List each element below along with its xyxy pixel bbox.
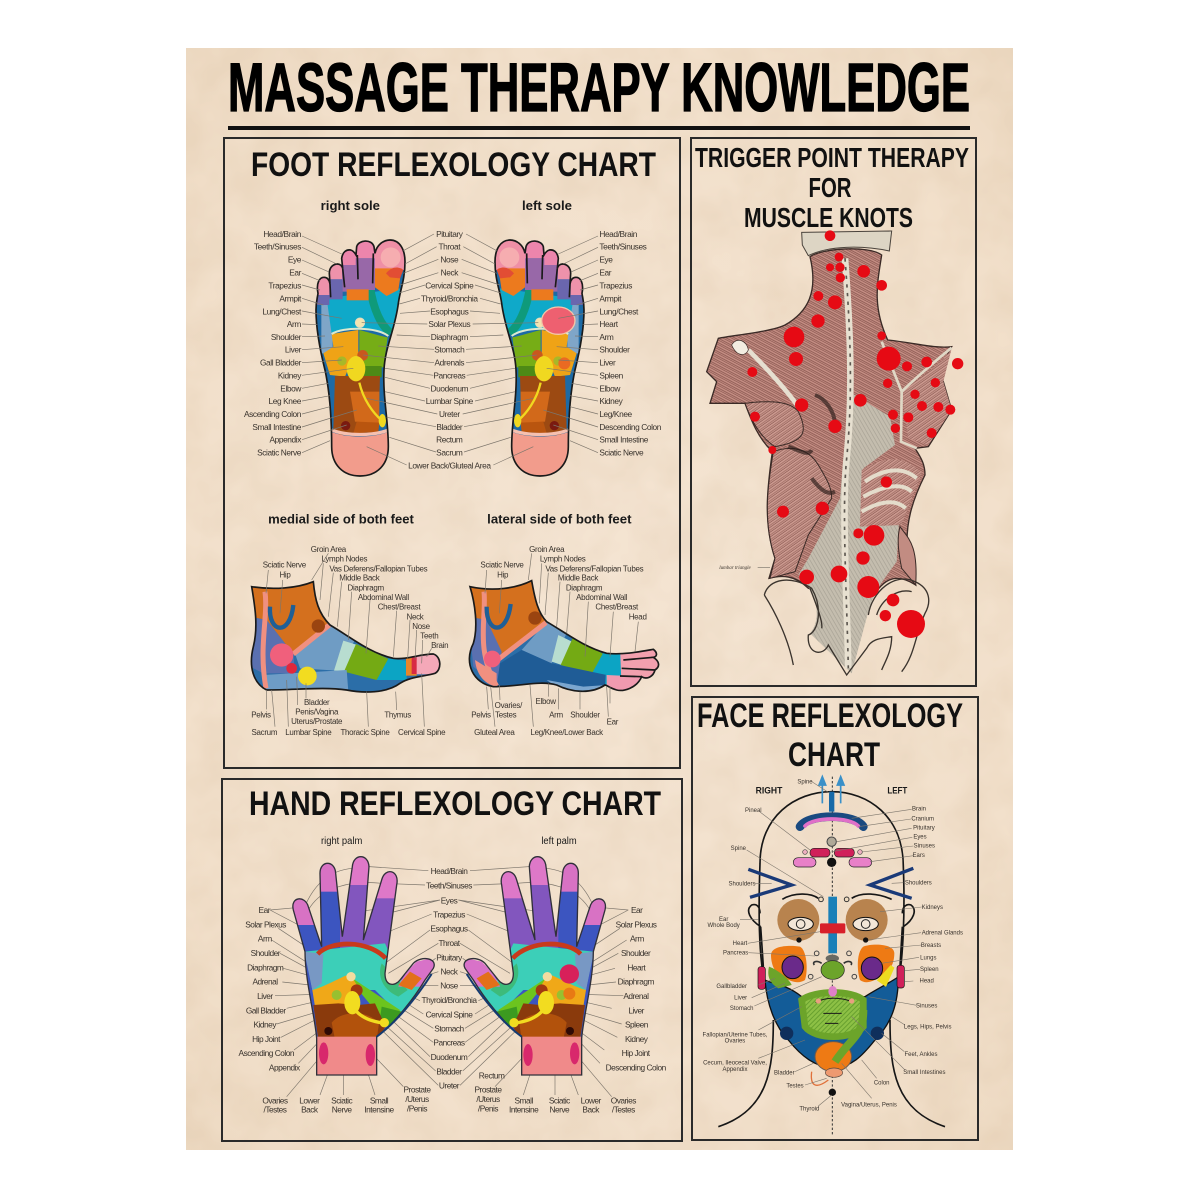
labels: side views: Uterus/Prostate <box>291 717 343 726</box>
labels: left sole: Liver <box>599 358 616 368</box>
labels: centre column: Rectum <box>436 435 463 445</box>
labels: face: Sinuses <box>916 1003 937 1009</box>
chart: palms: left palm <box>541 836 577 847</box>
labels: side views: Sciatic Nerve <box>263 560 307 569</box>
labels: side views: Thymus <box>384 710 411 719</box>
labels: side views: Hip <box>497 570 509 579</box>
labels: right sole: Leg Knee <box>269 396 302 406</box>
labels: left sole: Kidney <box>599 396 624 406</box>
chart: side views of the feet: medial side of both feet <box>268 512 415 526</box>
labels: centre column: Lower Back/Gluteal Area <box>408 460 491 470</box>
labels: palms: Solar Plexus <box>616 919 657 929</box>
icon: left palm <box>460 850 610 1080</box>
icon: right sole <box>313 237 407 480</box>
labels: palms: Hip Joint <box>622 1048 651 1058</box>
labels: palms: Diaphragm <box>247 962 284 972</box>
labels: palms: /Uterus <box>405 1094 429 1104</box>
labels: face <box>703 779 963 1113</box>
labels: face: Heart <box>733 941 748 947</box>
labels: side views: Pelvis <box>251 710 271 719</box>
labels: face: Liver <box>734 996 747 1002</box>
labels: palms: /Uterus <box>476 1094 500 1104</box>
labels: face: Spine <box>731 846 747 852</box>
labels: centre column: Pancreas <box>433 370 466 380</box>
labels: side views: Head <box>629 612 647 621</box>
labels: centre column: Cervical Spine <box>425 281 474 291</box>
labels: left sole: Trapezius <box>599 281 632 291</box>
icon: left sole <box>493 237 587 480</box>
labels: right sole: Gall Bladder <box>260 358 302 368</box>
labels: centre column: Nose <box>440 255 459 265</box>
labels: face: Ears <box>913 853 925 859</box>
labels: palms: Nerve <box>549 1105 570 1115</box>
labels: left sole: Ear <box>599 268 612 278</box>
labels: centre column: Diaphragm <box>431 332 468 342</box>
labels: centre column <box>408 229 491 470</box>
labels: right sole: Head/Brain <box>263 229 302 239</box>
labels: side views: Brain <box>431 641 448 650</box>
labels: palms: Neck <box>441 966 459 976</box>
labels: right sole: Appendix <box>269 435 302 445</box>
anatomy: pelvis <box>764 579 929 675</box>
labels: left sole: Lung/Chest <box>599 306 639 316</box>
labels: right sole: Teeth/Sinuses <box>254 242 301 252</box>
labels: side views: Nose <box>412 622 431 631</box>
labels: side views: Leg/Knee/Lower Back <box>530 728 603 737</box>
labels: palms: Prostate <box>403 1085 431 1095</box>
labels: palms: Arm <box>258 934 272 944</box>
icon: right palm <box>288 850 438 1080</box>
chart: side views of the feet <box>247 512 663 737</box>
labels: palms: Adrenal <box>623 991 649 1001</box>
labels: face: Stomach <box>730 1006 753 1012</box>
labels: face: Spleen <box>920 967 939 973</box>
labels: face: LEFT <box>887 786 908 796</box>
labels: palms: Trapezius <box>433 909 465 919</box>
labels: palms: Kidney <box>625 1034 649 1044</box>
chart: palms <box>239 836 667 1115</box>
labels: centre column: Duodenum <box>431 383 469 393</box>
labels: left sole: Leg/Knee <box>599 409 633 419</box>
labels: side views: Diaphragm <box>566 583 603 592</box>
labels: side views: Middle Back <box>558 574 598 583</box>
shoulder markers <box>748 868 913 898</box>
labels: centre column: Solar Plexus <box>428 319 471 329</box>
labels: palms: Adrenal <box>252 977 278 987</box>
labels: palms: Nose <box>440 981 459 991</box>
labels: centre column: Neck <box>441 268 459 278</box>
labels: palms: Throat <box>438 938 461 948</box>
labels: side views: Middle Back <box>339 574 380 583</box>
illustration: back muscles with trigger points <box>707 230 963 675</box>
labels: palms: Esophagus <box>430 924 468 934</box>
icon: lateral foot <box>463 578 663 695</box>
labels: face: Spine <box>797 779 813 785</box>
labels: left sole: Arm <box>599 332 614 342</box>
labels: right sole: Arm <box>287 319 301 329</box>
labels: side views: Vas Deferens/Fallopian Tubes <box>545 564 644 573</box>
labels: side views: Arm <box>549 710 564 719</box>
labels: side views: Pelvis <box>471 710 491 719</box>
labels: palms: Shoulder <box>251 948 281 958</box>
labels: palms: Ovaries <box>611 1095 636 1105</box>
nose zones <box>808 897 857 979</box>
chart: palms: right palm <box>321 836 362 847</box>
labels: side views: Sacrum <box>251 728 278 737</box>
trigger points <box>747 230 963 638</box>
anatomy: back muscles <box>707 231 952 673</box>
labels: right sole: Trapezius <box>268 281 301 291</box>
labels: side views: Thoracic Spine <box>340 728 390 737</box>
labels: palms: Kidney <box>254 1020 277 1030</box>
labels: palms: /Penis <box>478 1104 498 1114</box>
labels: left sole: Descending Colon <box>599 422 662 432</box>
labels: side views: Hip <box>279 570 291 579</box>
labels: side views: Elbow <box>536 697 556 706</box>
labels: palms: Sciatic <box>549 1095 570 1105</box>
labels: face: Fallopian/Uterine Tubes, <box>703 1032 768 1038</box>
labels: centre column: Stomach <box>434 345 465 355</box>
labels: palms: Prostate <box>474 1085 502 1095</box>
labels: side views: Ovaries/ <box>495 701 523 710</box>
labels: right sole: Sciatic Nerve <box>257 448 302 458</box>
chart: soles of the feet: left sole <box>522 198 572 213</box>
labels: side views: Testes <box>495 711 517 720</box>
labels: centre column: Pituitary <box>436 229 464 239</box>
labels: palms <box>239 866 667 1115</box>
head outline <box>718 792 945 1127</box>
labels: centre column: Ureter <box>439 409 460 419</box>
labels: palms: Head/Brain <box>431 866 468 876</box>
labels: left sole: Shoulder <box>599 345 630 355</box>
labels: face: Bladder <box>774 1071 795 1077</box>
heading: trigger point therapy for muscle knots: MUSCLE KNOTS <box>744 202 913 233</box>
labels: side views: Ear <box>607 718 619 727</box>
cheek zones <box>758 945 904 989</box>
panel: face reflexology chart <box>692 697 978 1140</box>
labels: centre column: Bladder <box>436 422 463 432</box>
labels: face: Cecum, Ileocecal Valve, <box>703 1061 767 1067</box>
labels: palms: Arm <box>630 934 644 944</box>
chart: soles of the feet <box>244 198 662 480</box>
labels: right sole: Armpit <box>279 293 302 303</box>
panel: trigger point therapy <box>691 138 976 686</box>
labels: palms: /Testes <box>264 1105 287 1115</box>
labels: side views: Sciatic Nerve <box>480 560 524 569</box>
labels: side views: Groin Area <box>529 545 565 554</box>
labels: face: Pituitary <box>913 826 935 832</box>
labels: face: Ear <box>719 917 728 923</box>
labels: centre column: Esophagus <box>430 306 469 316</box>
labels: side views: Bladder <box>304 698 330 707</box>
labels: face: Shoulders <box>729 881 755 887</box>
labels: side views: Teeth <box>420 631 438 640</box>
labels: right sole: Liver <box>285 345 302 355</box>
labels: left sole: Spleen <box>599 370 624 380</box>
labels: palms: Spleen <box>625 1020 649 1030</box>
labels: palms: Heart <box>627 962 646 972</box>
labels: side views: Gluteal Area <box>474 728 515 737</box>
labels: palms: Descending Colon <box>606 1062 667 1072</box>
labels: right sole: Ascending Colon <box>244 409 302 419</box>
labels: palms: Liver <box>628 1005 645 1015</box>
labels: side views: Vas Deferens/Fallopian Tubes <box>329 564 428 573</box>
labels: face: Head <box>920 979 934 985</box>
labels: left sole: Small Intestine <box>599 435 649 445</box>
heading: foot reflexology chart: FOOT REFLEXOLOGY CHART <box>251 146 656 184</box>
labels: centre column: Thyroid/Bronchia <box>421 293 478 303</box>
labels: palms: Pituitary <box>436 952 463 962</box>
labels: palms: Pancreas <box>433 1038 465 1048</box>
labels: palms: Small <box>370 1095 389 1105</box>
labels: right sole: Eye <box>288 255 302 265</box>
labels: face: Shoulders <box>905 881 932 887</box>
labels: palms: Duodenum <box>431 1052 468 1062</box>
forehead zones <box>793 792 872 1096</box>
eye zones <box>777 894 892 943</box>
labels: palms: Intensine <box>509 1105 539 1115</box>
labels: face: Legs, Hips, Pelvis <box>904 1025 951 1031</box>
labels: face: Lungs <box>920 955 936 961</box>
heading: trigger point therapy for muscle knots: FOR <box>808 172 852 203</box>
labels: side views: Chest/Breast <box>595 603 639 612</box>
chart: soles of the feet: right sole <box>321 198 380 213</box>
labels: centre column: Throat <box>438 242 461 252</box>
labels: palms: /Penis <box>407 1104 427 1114</box>
labels: face: Adrenal Glands <box>922 930 963 936</box>
labels: side views: Groin Area <box>311 545 347 554</box>
labels: palms: Lower <box>299 1095 320 1105</box>
panel: hand reflexology chart <box>222 779 682 1141</box>
labels: palms: Lower <box>581 1095 601 1105</box>
labels: face: Colon <box>874 1081 889 1087</box>
labels: side views: Lymph Nodes <box>540 555 586 564</box>
labels: face: Small Intestines <box>903 1070 945 1076</box>
labels: side views: Cervical Spine <box>398 728 446 737</box>
labels: palms: Liver <box>257 991 273 1001</box>
caption: lumbar triangle: lumbar triangle <box>719 566 751 571</box>
labels: face: Feet, Ankles <box>905 1052 937 1058</box>
labels: face: Sinuses <box>914 843 935 849</box>
labels: palms: Gall Bladder <box>246 1005 286 1015</box>
labels: side views <box>251 545 647 737</box>
labels: left sole: Eye <box>599 255 613 265</box>
labels: left sole: Head/Brain <box>599 229 638 239</box>
heading: face reflexology chart: CHART <box>788 736 880 774</box>
labels: centre column: Lumbar Spine <box>426 396 474 406</box>
chart: side views of the feet: lateral side of both feet <box>487 512 632 526</box>
caption: lumbar triangle <box>719 566 770 571</box>
labels: side views: Chest/Breast <box>378 603 421 612</box>
labels: palms: Ovaries <box>262 1095 288 1105</box>
labels: right sole: Kidney <box>278 370 302 380</box>
labels: palms: Shoulder <box>621 948 651 958</box>
heading: face reflexology chart <box>697 697 963 774</box>
labels: palms: Solar Plexus <box>245 919 286 929</box>
labels: palms: Hip Joint <box>252 1034 281 1044</box>
labels: face: Gallbladder <box>716 984 747 990</box>
labels: palms: Diaphragm <box>618 977 654 987</box>
labels: face: RIGHT <box>756 786 783 796</box>
labels: palms: Cervical Spine <box>426 1009 473 1019</box>
jaw zone <box>765 977 898 1068</box>
labels: palms: Appendix <box>269 1062 301 1072</box>
labels: face: Breasts <box>921 943 941 949</box>
heading: trigger point therapy for muscle knots: TRIGGER POINT THERAPY <box>695 142 969 173</box>
labels: right sole: Small Intestine <box>252 422 302 432</box>
labels: palms: Small <box>514 1095 533 1105</box>
heading: hand reflexology chart: HAND REFLEXOLOGY CHART <box>249 785 661 823</box>
labels: face: Cranium <box>911 816 934 822</box>
labels: palms: Rectum <box>479 1070 505 1080</box>
arrows: spine energy <box>819 777 844 803</box>
labels: right sole: Lung/Chest <box>262 306 302 316</box>
labels: side views: Shoulder <box>570 710 600 719</box>
heading: face reflexology chart: FACE REFLEXOLOGY <box>697 697 963 735</box>
labels: right sole: Elbow <box>280 383 302 393</box>
heading: trigger point therapy for muscle knots <box>695 142 969 233</box>
labels: palms: Intensine <box>364 1105 395 1115</box>
labels: face: Ovaries <box>725 1038 745 1044</box>
chart: face map <box>703 777 963 1135</box>
labels: face: Appendix <box>723 1067 747 1073</box>
labels: side views: Abdominal Wall <box>576 593 628 602</box>
labels: palms: Teeth/Sinuses <box>426 880 472 890</box>
panel: foot reflexology chart <box>224 138 680 768</box>
labels: side views: Diaphragm <box>347 583 384 592</box>
labels: left sole: Elbow <box>599 383 621 393</box>
labels: left sole: Heart <box>599 319 619 329</box>
labels: palms: Eyes <box>441 895 458 905</box>
labels: face: Pancreas <box>723 950 748 956</box>
labels: side views: Neck <box>406 612 424 621</box>
labels: centre column: Adrenals <box>434 358 464 368</box>
labels: centre column: Sacrum <box>436 448 463 458</box>
labels: left sole: Teeth/Sinuses <box>599 242 647 252</box>
labels: right sole <box>244 229 302 458</box>
labels: face: Kidneys <box>922 905 943 911</box>
labels: palms: Bladder <box>436 1066 462 1076</box>
labels: palms: Ear <box>259 905 271 915</box>
labels: right sole: Ear <box>289 268 302 278</box>
mouth zone <box>802 986 863 1077</box>
labels: face: Thyroid <box>799 1107 819 1113</box>
labels: side views: Lymph Nodes <box>321 555 367 564</box>
labels: face: Whole Body <box>708 923 740 929</box>
labels: palms: Back <box>582 1105 600 1115</box>
labels: face: Testes <box>786 1084 804 1090</box>
labels: left sole <box>599 229 662 458</box>
labels: side views: Penis/Vagina <box>295 708 339 717</box>
labels: face: Brain <box>912 807 926 813</box>
labels: face: Vagina/Uterus, Penis <box>841 1102 897 1108</box>
labels: face: Eyes <box>913 835 927 841</box>
labels: right sole: Shoulder <box>271 332 302 342</box>
labels: palms: Sciatic <box>331 1095 353 1105</box>
labels: left sole: Armpit <box>599 293 622 303</box>
labels: left sole: Sciatic Nerve <box>599 448 644 458</box>
labels: palms: Stomach <box>434 1024 465 1034</box>
labels: palms: Thyroid/Bronchia <box>422 995 477 1005</box>
labels: side views: Abdominal Wall <box>358 593 409 602</box>
labels: palms: /Testes <box>612 1105 635 1115</box>
labels: palms: Nerve <box>332 1105 352 1115</box>
labels: face: Pineal <box>745 808 762 814</box>
labels: palms: Ascending Colon <box>239 1048 295 1058</box>
icon: medial foot <box>247 580 447 697</box>
labels: palms: Ear <box>631 905 643 915</box>
labels: side views: Lumbar Spine <box>285 728 332 737</box>
poster background <box>186 48 1013 1150</box>
labels: palms: Back <box>301 1105 319 1115</box>
labels: palms: Ureter <box>439 1081 460 1091</box>
